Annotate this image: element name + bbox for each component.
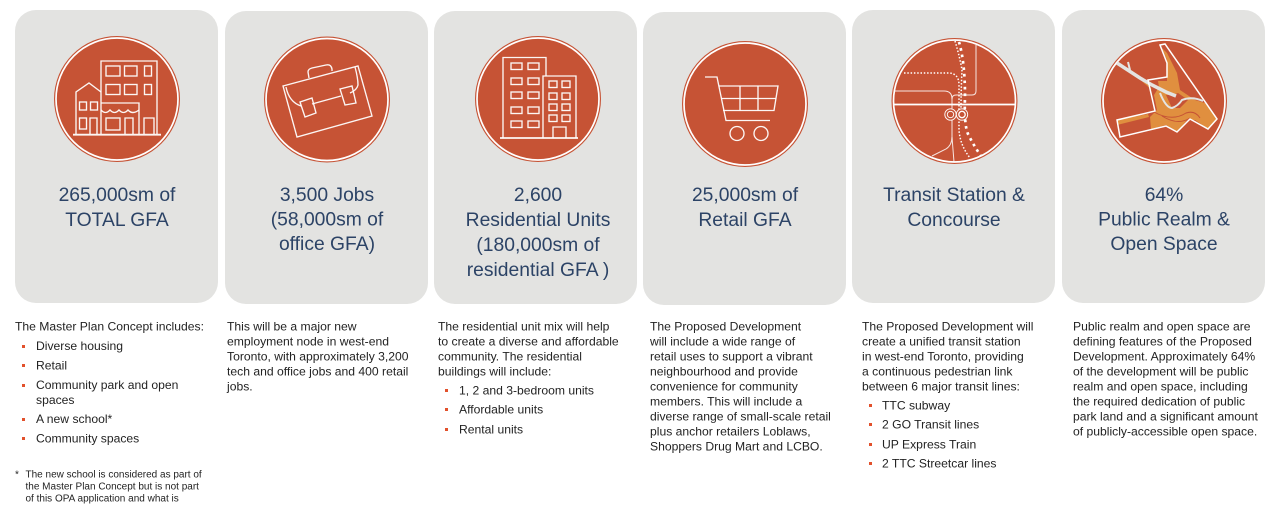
heading: jobs: (58,000sm of [271, 210, 384, 230]
heading: public realm: Open Space [1110, 234, 1218, 255]
text block: retail: diverse range of small-scale retail [650, 410, 831, 424]
text block: transit: The Proposed Development will [862, 320, 1033, 334]
text block: residential mix [438, 320, 619, 436]
icon: transit map [892, 38, 1018, 164]
list: master plan items: Community spaces [36, 432, 139, 446]
text block: public realm: realm and open space, including [1073, 380, 1248, 394]
text block: public realm: Development. Approximately 64% [1073, 350, 1255, 364]
icon: public realm site plan [1101, 38, 1227, 164]
icon: apartment towers [475, 36, 601, 162]
text block: transit: in west-end Toronto, providing [862, 350, 1024, 364]
text block: public realm: Public realm and open space are [1073, 320, 1250, 334]
text block: employment: Toronto, with approximately 3,200 [227, 350, 409, 364]
text block: employment: jobs. [226, 380, 253, 394]
heading: jobs: 3,500 Jobs [280, 185, 374, 206]
panel: public realm [1062, 10, 1265, 303]
card background: public realm [1062, 10, 1265, 303]
text block: retail: will include a wide range of [649, 334, 796, 348]
text block: employment: employment node in west-end [227, 334, 389, 348]
heading: jobs: office GFA) [279, 234, 375, 255]
text block: retail: The Proposed Development [650, 320, 801, 334]
heading: transit station: Concourse [907, 210, 1001, 231]
text block: retail: retail uses to support a vibrant [650, 350, 813, 364]
card background: jobs [225, 11, 428, 304]
list: transit lines [869, 398, 996, 470]
panel: jobs [225, 11, 428, 304]
text block: retail: Shoppers Drug Mart and LCBO. [650, 440, 823, 454]
text block: public realm: park land and a significant amount [1073, 410, 1259, 424]
text block: master plan concept: The Master Plan Concept includes: [15, 320, 204, 334]
text block: public realm: defining features of the Proposed [1073, 334, 1252, 348]
text block: employment: tech and office jobs and 400 retail [227, 364, 408, 378]
text block: transit: between 6 major transit lines: [862, 380, 1020, 394]
card background: total GFA [15, 10, 218, 303]
text block: employment: This will be a major new [227, 320, 357, 334]
panel: total GFA [15, 10, 218, 303]
text block: retail: plus anchor retailers Loblaws, [650, 424, 811, 438]
card background: retail GFA [643, 12, 846, 305]
footnote [15, 470, 202, 504]
heading: residential units: (180,000sm of [476, 235, 600, 256]
icon: shopping cart [682, 41, 808, 167]
list: residential unit types: 1, 2 and 3-bedroom units [459, 384, 594, 398]
list: master plan items: Retail [36, 358, 67, 372]
icon: briefcase [264, 36, 390, 162]
text block: retail: convenience for community [650, 380, 799, 394]
icon: mixed-use buildings [54, 36, 180, 162]
heading: transit station: Transit Station & [883, 185, 1025, 206]
list: residential unit types: Rental units [459, 422, 523, 436]
text block: public realm: the required dedication of public [1073, 394, 1245, 408]
card background: residential units [434, 11, 637, 304]
heading: retail GFA: Retail GFA [698, 210, 792, 231]
footnote: the Master Plan Concept but is not part [26, 482, 199, 492]
list: residential unit types: Affordable units [459, 402, 543, 416]
heading: residential units: Residential Units [466, 210, 610, 231]
text block: retail: neighbourhood and provide [650, 364, 798, 378]
heading: residential units: residential GFA ) [467, 260, 609, 281]
heading: total GFA: 265,000sm of [59, 185, 175, 206]
list: master plan items [22, 339, 178, 446]
text block: master plan concept [15, 320, 204, 504]
list: residential unit types [445, 384, 594, 436]
list: transit lines: 2 TTC Streetcar lines [882, 456, 996, 470]
heading: public realm: Public Realm & [1098, 210, 1230, 230]
text block: residential mix: buildings will include: [438, 364, 551, 378]
footnote: of this OPA application and what is [26, 494, 179, 504]
list: transit lines: 2 GO Transit lines [882, 418, 979, 432]
text block: residential mix: community. The residential [438, 350, 582, 364]
panel: residential units [434, 11, 637, 304]
heading: residential units: 2,600 [514, 185, 562, 206]
list: master plan items: Community park and open [36, 378, 178, 392]
footnote: The new school is considered as part of [26, 470, 202, 480]
panel: retail GFA [643, 12, 846, 305]
text block: residential mix: The residential unit mix will help [438, 320, 609, 334]
panel: transit station [852, 10, 1055, 303]
list: master plan items: Diverse housing [36, 339, 123, 353]
text block: residential mix: to create a diverse and affordable [438, 334, 619, 348]
list: master plan items: A new school* [36, 412, 113, 426]
text block: public realm: of the development will be public [1073, 364, 1248, 378]
list: transit lines: TTC subway [882, 398, 951, 412]
text block: public realm: of publicly-accessible open space. [1073, 424, 1257, 438]
text block: transit: a continuous pedestrian link [862, 364, 1013, 378]
text block: retail: members. This will include a [650, 394, 803, 408]
heading: public realm: 64% [1145, 185, 1183, 206]
heading: retail GFA: 25,000sm of [692, 185, 798, 206]
footnote: * [15, 470, 19, 480]
list: master plan items: spaces [36, 393, 74, 407]
text block: transit [862, 320, 1033, 470]
text block: transit: create a unified transit station [862, 334, 1021, 348]
card background: transit station [852, 10, 1055, 303]
heading: total GFA: TOTAL GFA [65, 210, 169, 231]
list: transit lines: UP Express Train [882, 438, 976, 452]
